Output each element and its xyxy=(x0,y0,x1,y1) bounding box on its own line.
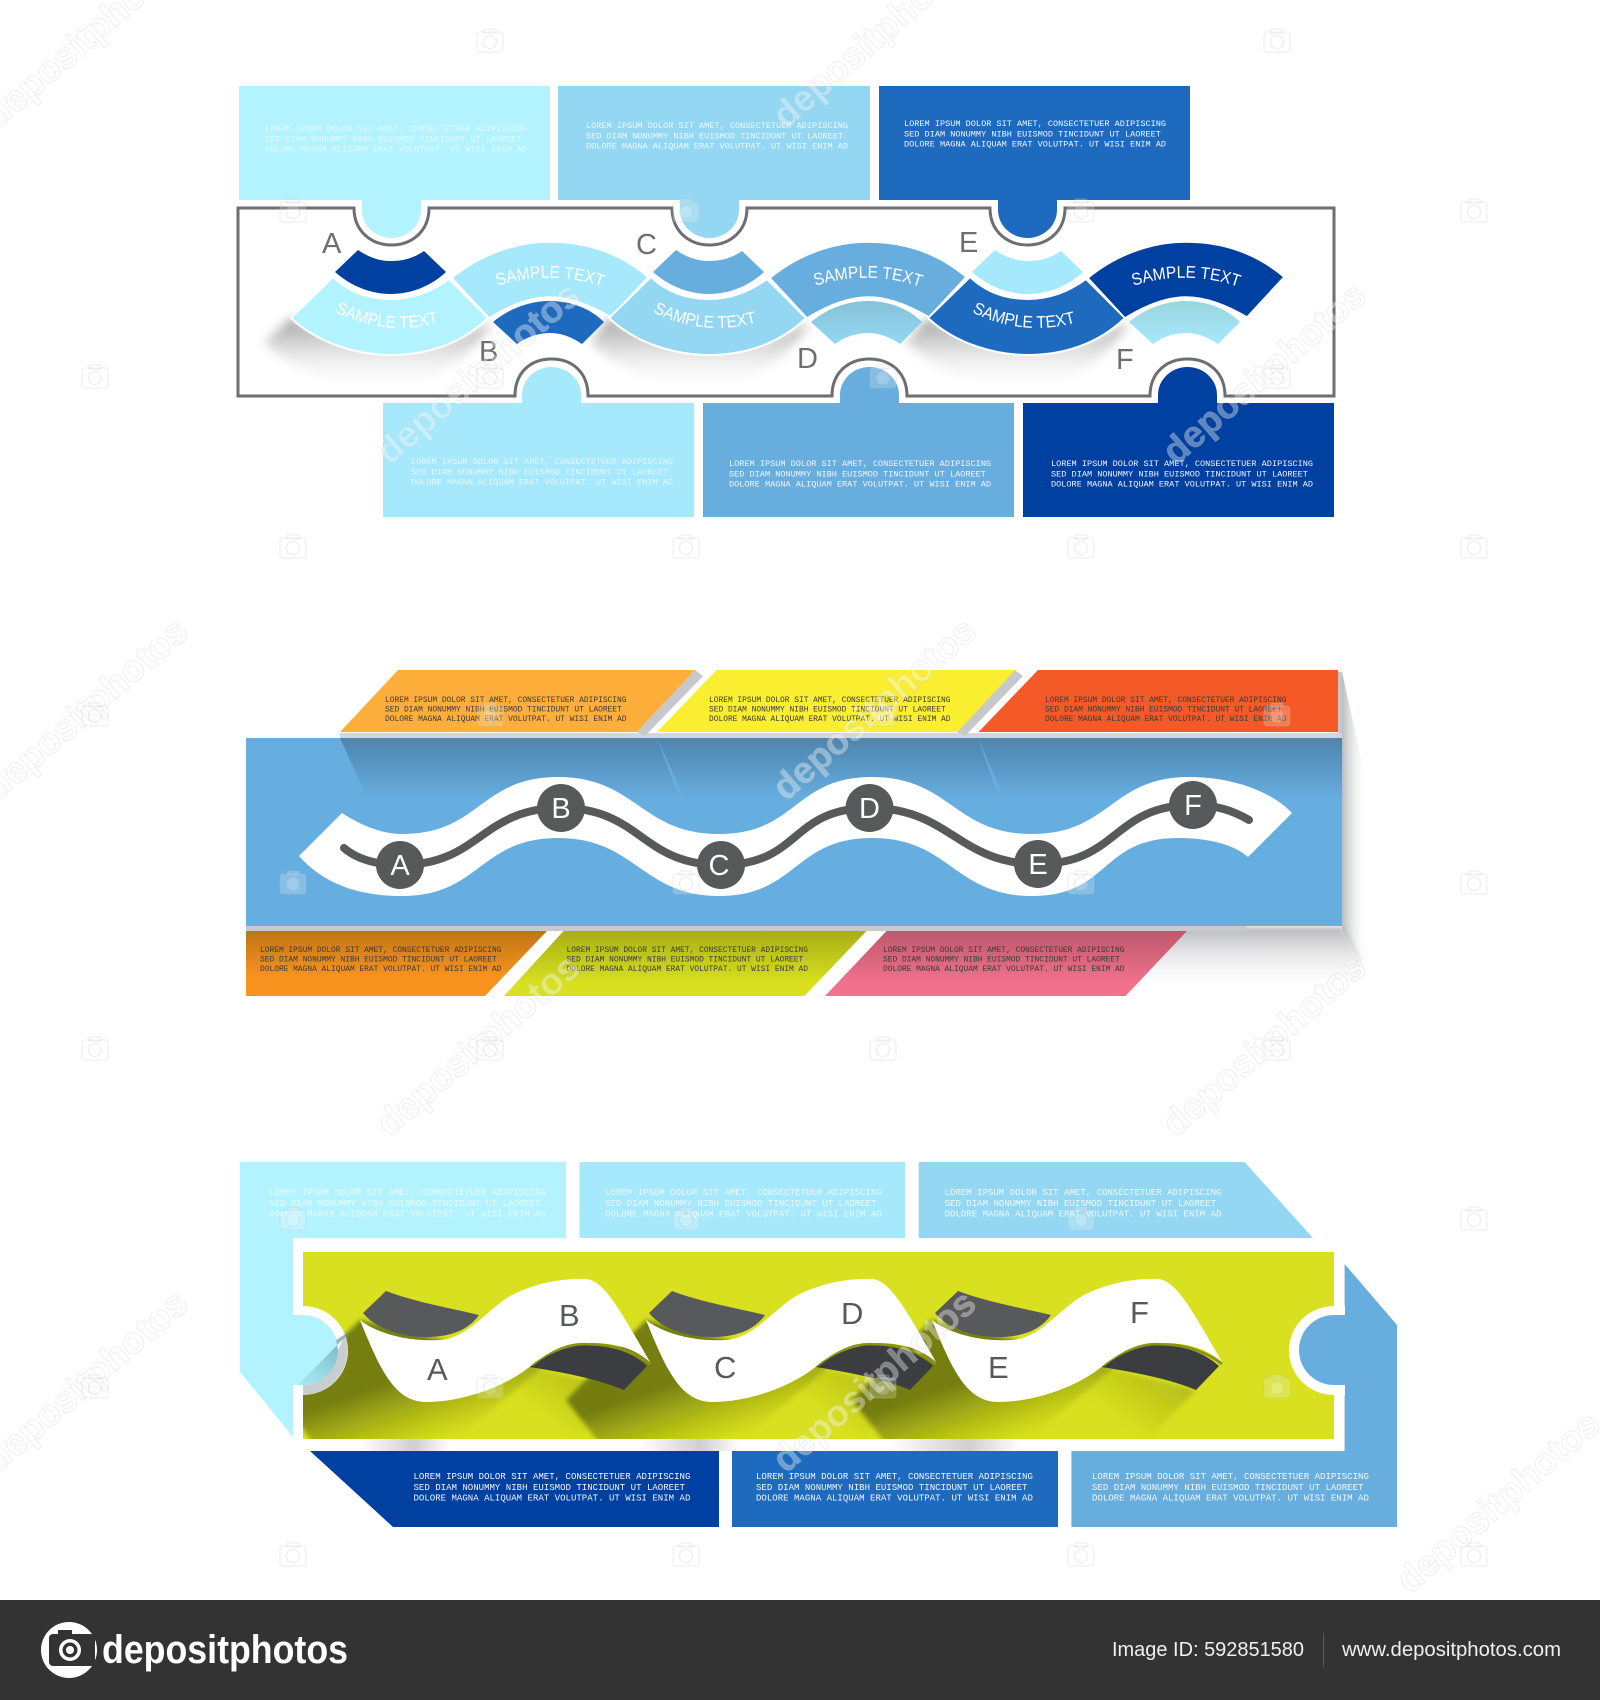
blue banner xyxy=(246,738,1342,926)
label box dark orange xyxy=(246,931,547,996)
route marker B: B xyxy=(551,793,571,825)
wave segment C: SAMPLE TEXT xyxy=(654,303,754,328)
wave segment F: SAMPLE TEXT xyxy=(1132,266,1242,286)
footer divider xyxy=(1323,1633,1324,1667)
watermark pattern: depositphotos xyxy=(1154,946,1374,1144)
label box yellow: SED DIAM NONUMMY NIBH EUISMOD TINCIDUNT UT LAOREET xyxy=(709,706,946,714)
text box top middle: LOREM IPSUM DOLOR SIT AMET, CONSECTETUER ADIPISCING xyxy=(605,1187,882,1198)
route marker A xyxy=(376,841,424,889)
label box yellow: DOLORE MAGNA ALIQUAM ERAT VOLUTPAT. UT WISI ENIM AD xyxy=(709,715,951,724)
banner shadows xyxy=(246,670,1368,992)
text box bottom 1: SED DIAM NONUMMY NIBH EUISMOD TINCIDUNT UT LAOREET xyxy=(411,467,668,477)
wave segment A xyxy=(290,228,486,356)
wave segment D: SAMPLE TEXT xyxy=(814,266,924,286)
text box top left with corner: LOREM IPSUM DOLOR SIT AMET, CONSECTETUER ADIPISCING xyxy=(269,1187,546,1198)
puzzle tab right xyxy=(1289,1306,1345,1395)
long ribbon shadows xyxy=(280,1320,1196,1445)
text box top right: SED DIAM NONUMMY NIBH EUISMOD TINCIDUNT UT LAOREET xyxy=(945,1198,1217,1209)
label box red xyxy=(978,670,1338,732)
text box top 2 xyxy=(558,86,870,238)
label box orange: LOREM IPSUM DOLOR SIT AMET, CONSECTETUER ADIPISCING xyxy=(385,696,627,705)
route marker E xyxy=(1014,840,1062,888)
panel: road wave on blue banner xyxy=(246,670,1368,996)
wave segment B xyxy=(453,242,647,368)
text box top right xyxy=(919,1162,1313,1238)
wave shadows xyxy=(264,318,1129,390)
text box top middle xyxy=(580,1162,905,1238)
route marker F xyxy=(1169,781,1217,829)
text box top 3 xyxy=(879,86,1190,238)
text box top 1 xyxy=(239,86,550,238)
puzzle tab left xyxy=(293,1306,352,1395)
text box top middle: SED DIAM NONUMMY NIBH EUISMOD TINCIDUNT UT LAOREET xyxy=(605,1198,877,1209)
text box bottom left: DOLORE MAGNA ALIQUAM ERAT VOLUTPAT. UT WISI ENIM AD xyxy=(414,1493,690,1504)
label box pink: DOLORE MAGNA ALIQUAM ERAT VOLUTPAT. UT WISI ENIM AD xyxy=(883,965,1125,974)
wave segment F: F xyxy=(1116,344,1134,376)
label box dark orange: LOREM IPSUM DOLOR SIT AMET, CONSECTETUER ADIPISCING xyxy=(260,946,502,955)
label box yellow: LOREM IPSUM DOLOR SIT AMET, CONSECTETUER ADIPISCING xyxy=(709,696,951,705)
ribbon E F: E xyxy=(988,1350,1009,1385)
text box bottom middle xyxy=(732,1451,1058,1527)
text box top 3: SED DIAM NONUMMY NIBH EUISMOD TINCIDUNT UT LAOREET xyxy=(904,129,1161,139)
ribbon C D xyxy=(646,1279,936,1402)
text box top right: DOLORE MAGNA ALIQUAM ERAT VOLUTPAT. UT WISI ENIM AD xyxy=(945,1209,1221,1220)
text box top left with corner xyxy=(240,1162,566,1437)
ribbon A B: A xyxy=(427,1352,448,1387)
watermark pattern: depositphotos xyxy=(368,946,588,1144)
text box top 1: SED DIAM NONUMMY NIBH EUISMOD TINCIDUNT UT LAOREET xyxy=(265,134,522,144)
text box top 3: LOREM IPSUM DOLOR SIT AMET, CONSECTETUER ADIPISCING xyxy=(904,119,1166,129)
text box bottom 2: SED DIAM NONUMMY NIBH EUISMOD TINCIDUNT UT LAOREET xyxy=(729,469,986,479)
route marker D xyxy=(846,784,894,832)
puzzle frame outline xyxy=(238,208,1334,396)
label box pink xyxy=(825,931,1187,996)
label box orange xyxy=(340,670,695,732)
watermark pattern: depositphotos xyxy=(368,274,588,472)
label box lime: SED DIAM NONUMMY NIBH EUISMOD TINCIDUNT UT LAOREET xyxy=(566,956,804,964)
watermark pattern: depositphotos xyxy=(764,1282,984,1480)
label box red: LOREM IPSUM DOLOR SIT AMET, CONSECTETUER ADIPISCING xyxy=(1045,696,1287,705)
watermark pattern: depositphotos xyxy=(1154,274,1374,472)
text box bottom left: SED DIAM NONUMMY NIBH EUISMOD TINCIDUNT UT LAOREET xyxy=(414,1482,686,1493)
footer bar xyxy=(0,1600,1600,1700)
text box top 1: DOLORE MAGNA ALIQUAM ERAT VOLUTPAT. UT WISI ENIM AD xyxy=(265,145,527,155)
label box red: SED DIAM NONUMMY NIBH EUISMOD TINCIDUNT UT LAOREET xyxy=(1045,706,1282,714)
route marker C: C xyxy=(709,850,729,882)
label box pink: SED DIAM NONUMMY NIBH EUISMOD TINCIDUNT UT LAOREET xyxy=(883,956,1120,964)
ribbon A B: B xyxy=(559,1298,580,1333)
text box bottom 2: LOREM IPSUM DOLOR SIT AMET, CONSECTETUER ADIPISCING xyxy=(729,459,991,469)
text box top 3: DOLORE MAGNA ALIQUAM ERAT VOLUTPAT. UT WISI ENIM AD xyxy=(904,140,1166,150)
logo wordmark: depositphotos xyxy=(102,1628,348,1672)
text box top 2: DOLORE MAGNA ALIQUAM ERAT VOLUTPAT. UT WISI ENIM AD xyxy=(586,142,848,152)
text box bottom left: LOREM IPSUM DOLOR SIT AMET, CONSECTETUER ADIPISCING xyxy=(414,1471,690,1482)
text box bottom right with corner: LOREM IPSUM DOLOR SIT AMET, CONSECTETUER ADIPISCING xyxy=(1092,1471,1369,1482)
text box bottom middle: LOREM IPSUM DOLOR SIT AMET, CONSECTETUER ADIPISCING xyxy=(756,1471,1033,1482)
soft strip shadows under lime panel xyxy=(360,1439,1020,1451)
wave segment E xyxy=(926,227,1124,356)
text box bottom 3: LOREM IPSUM DOLOR SIT AMET, CONSECTETUER ADIPISCING xyxy=(1051,459,1313,469)
route marker C xyxy=(697,841,745,889)
wave segment E: SAMPLE TEXT xyxy=(974,303,1074,328)
wave segment D: D xyxy=(797,343,818,375)
label box lime: DOLORE MAGNA ALIQUAM ERAT VOLUTPAT. UT WISI ENIM AD xyxy=(566,965,808,974)
wave segment A: SAMPLE TEXT xyxy=(336,303,436,328)
label box red: DOLORE MAGNA ALIQUAM ERAT VOLUTPAT. UT WISI ENIM AD xyxy=(1045,715,1287,724)
text box bottom 3: SED DIAM NONUMMY NIBH EUISMOD TINCIDUNT UT LAOREET xyxy=(1051,469,1308,479)
text box bottom 1 xyxy=(383,367,694,517)
label box orange: SED DIAM NONUMMY NIBH EUISMOD TINCIDUNT UT LAOREET xyxy=(385,706,622,714)
route marker B xyxy=(537,784,585,832)
text box bottom 3: DOLORE MAGNA ALIQUAM ERAT VOLUTPAT. UT WISI ENIM AD xyxy=(1051,480,1313,490)
route marker A: A xyxy=(390,850,410,882)
route marker E: E xyxy=(1028,849,1048,881)
text box bottom middle: SED DIAM NONUMMY NIBH EUISMOD TINCIDUNT UT LAOREET xyxy=(756,1482,1028,1493)
route marker F: F xyxy=(1184,790,1202,822)
text box top 2: LOREM IPSUM DOLOR SIT AMET, CONSECTETUER ADIPISCING xyxy=(586,121,848,131)
ribbon E F xyxy=(932,1279,1222,1402)
text box bottom left xyxy=(310,1451,719,1527)
label box pink: LOREM IPSUM DOLOR SIT AMET, CONSECTETUER ADIPISCING xyxy=(883,946,1125,955)
banner inner shadows xyxy=(340,738,1342,800)
text box bottom right with corner: DOLORE MAGNA ALIQUAM ERAT VOLUTPAT. UT WISI ENIM AD xyxy=(1092,1493,1369,1504)
text box top left with corner: SED DIAM NONUMMY NIBH EUISMOD TINCIDUNT UT LAOREET xyxy=(269,1198,541,1209)
text box top left with corner: DOLORE MAGNA ALIQUAM ERAT VOLUTPAT. UT WISI ENIM AD xyxy=(269,1209,546,1220)
wave segment B: B xyxy=(479,336,498,368)
text box bottom right with corner: SED DIAM NONUMMY NIBH EUISMOD TINCIDUNT UT LAOREET xyxy=(1092,1482,1364,1493)
text box bottom 3 xyxy=(1023,367,1334,517)
wave segment C: C xyxy=(636,229,657,261)
label box orange: DOLORE MAGNA ALIQUAM ERAT VOLUTPAT. UT WISI ENIM AD xyxy=(385,715,627,724)
text box bottom right with corner xyxy=(1071,1264,1397,1527)
wave segment B: SAMPLE TEXT xyxy=(496,266,606,286)
label box lime xyxy=(504,931,866,996)
text box bottom 1: LOREM IPSUM DOLOR SIT AMET, CONSECTETUER ADIPISCING xyxy=(411,457,673,467)
label box lime: LOREM IPSUM DOLOR SIT AMET, CONSECTETUER ADIPISCING xyxy=(566,946,808,955)
watermark pattern: depositphotos xyxy=(764,610,984,808)
dark route line xyxy=(344,805,1249,865)
text box bottom 2 xyxy=(703,367,1014,517)
text box top 2: SED DIAM NONUMMY NIBH EUISMOD TINCIDUNT UT LAOREET xyxy=(586,131,843,141)
ribbon C D: D xyxy=(841,1296,863,1331)
label box yellow xyxy=(657,670,1015,732)
wave segment C xyxy=(608,229,804,356)
icon: camera logo xyxy=(41,1622,97,1678)
text box top right: LOREM IPSUM DOLOR SIT AMET, CONSECTETUER ADIPISCING xyxy=(945,1187,1221,1198)
wave segment F xyxy=(1089,242,1283,376)
text box bottom 2: DOLORE MAGNA ALIQUAM ERAT VOLUTPAT. UT WISI ENIM AD xyxy=(729,480,991,490)
label box dark orange: DOLORE MAGNA ALIQUAM ERAT VOLUTPAT. UT WISI ENIM AD xyxy=(260,965,502,974)
wave segment E: E xyxy=(959,227,978,259)
watermark camera icons xyxy=(82,29,1487,1566)
lime panel xyxy=(303,1252,1334,1439)
panel: ribbon on lime xyxy=(240,1162,1397,1527)
image id: Image ID: 592851580 xyxy=(1112,1639,1304,1661)
ribbon E F: F xyxy=(1130,1295,1149,1330)
text box top middle: DOLORE MAGNA ALIQUAM ERAT VOLUTPAT. UT WISI ENIM AD xyxy=(605,1209,882,1220)
route marker D: D xyxy=(859,793,880,825)
text box bottom middle: DOLORE MAGNA ALIQUAM ERAT VOLUTPAT. UT WISI ENIM AD xyxy=(756,1493,1033,1504)
panel: blue puzzle wave xyxy=(236,86,1336,517)
white wave road xyxy=(299,777,1292,896)
text box top 1: LOREM IPSUM DOLOR SIT AMET, CONSECTETUER ADIPISCING xyxy=(265,124,527,134)
wave segment D xyxy=(771,242,965,375)
ribbon A B xyxy=(360,1279,650,1402)
label box dark orange: SED DIAM NONUMMY NIBH EUISMOD TINCIDUNT UT LAOREET xyxy=(260,956,497,964)
ribbon C D: C xyxy=(714,1350,736,1385)
text box bottom 1: DOLORE MAGNA ALIQUAM ERAT VOLUTPAT. UT WISI ENIM AD xyxy=(411,478,673,488)
wave segment A: A xyxy=(322,228,342,260)
website: www.depositphotos.com xyxy=(1341,1639,1561,1661)
